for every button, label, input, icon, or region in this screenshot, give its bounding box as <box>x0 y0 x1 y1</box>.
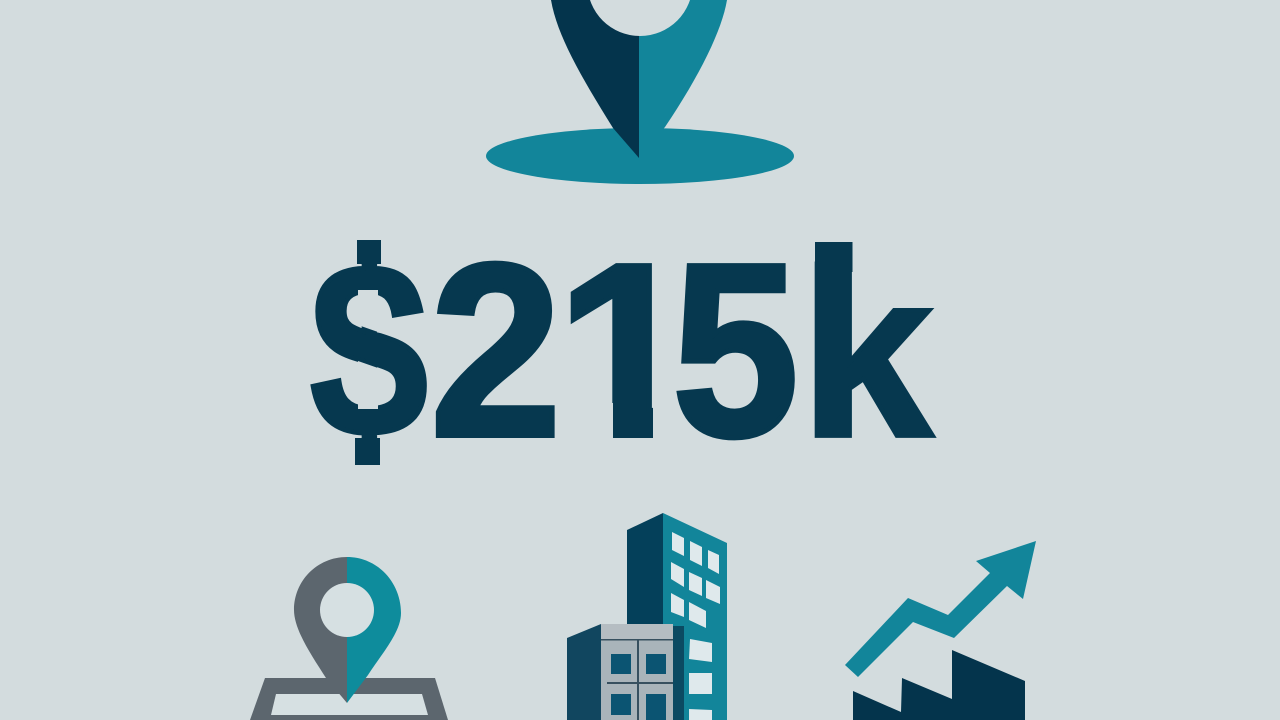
icon: rising arrow over factory <box>845 541 1036 720</box>
icon: map pin on map <box>250 557 448 720</box>
icon: large location pin <box>486 0 794 184</box>
icon: office buildings <box>567 513 727 720</box>
title: price figure: 1 <box>556 212 696 488</box>
title: price figure: k <box>800 222 933 487</box>
title: price figure: 5 <box>672 213 799 488</box>
title: price figure: $ <box>310 212 428 488</box>
title: price figure: 2 <box>430 213 562 489</box>
title: price figure <box>310 212 932 489</box>
